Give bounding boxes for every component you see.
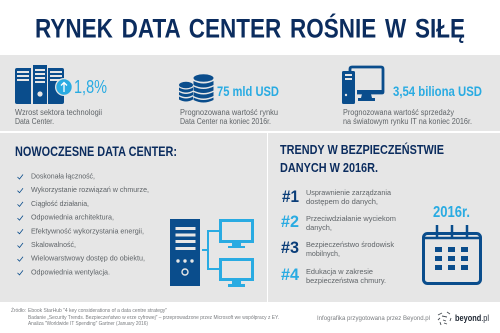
checklist: Wykorzystanie rozwiązań w chmurze, [31,185,149,194]
trend 2: #2 [281,212,299,231]
icon: server towers [15,65,73,104]
heading: TRENDY W BEZPIECZEŃSTWIE [280,142,444,157]
panel: security trends [268,133,500,302]
text: data center market forecast [180,108,278,126]
icon: server connected to monitors [170,219,252,287]
heading: DANYCH W 2016R. [280,161,378,175]
footer sources: Ebook StarHub "4 key considerations of a data centre strategy" [28,308,167,314]
trend 4: #4 [281,265,300,284]
footer sources: Badanie „Security Trends. Bezpieczeństwo w erze cyfrowej” – przeprowadzone przez Microsoft we współpracy z EY. [28,315,279,321]
panel: top statistics [0,55,500,131]
stat: 75 mld USD: 75 mld USD [217,84,279,99]
icon: calendar [423,225,481,284]
checklist: Ciągłość działania, [31,199,89,208]
checklist: Wielowarstwowy dostęp do obiektu, [31,254,145,263]
trend 1: dostępem do danych, [306,197,378,206]
trend 3: #3 [281,238,299,257]
checklist [18,172,149,276]
heading [280,142,444,175]
year label: 2016r. [433,204,470,221]
trend 4: bezpieczeństwa chmury. [306,276,386,285]
checklist: Doskonała łączność, [31,172,95,180]
trend 2: danych, [306,223,332,232]
icon: desktop computer [342,67,383,104]
checklist: Odpowiednia wentylacja. [31,267,110,276]
stat: 1,8%: 1,8% [74,77,107,97]
footer credit: Infografika przygotowana przez Beyond.pl [317,315,431,322]
text: global IT market forecast: Prognozowana wartość sprzedaży [343,108,454,117]
footer sources: Analiza "Worldwide IT Spending" Gartner (January 2016) [28,321,148,327]
trend 3: Bezpieczeństwo środowisk [306,240,394,249]
text: data center market forecast: Prognozowana wartość rynku [180,108,278,117]
trend 2: Przeciwdziałanie wyciekom [306,214,396,223]
text: technology growth: Data Center. [15,117,54,126]
checklist: Efektywność wykorzystania energii, [31,226,144,235]
text: technology growth [15,108,102,126]
logo: beyond.pl [438,312,489,325]
trend 1 [282,187,392,206]
text: global IT market forecast: na światowym rynku IT na koniec 2016r. [343,117,472,126]
trend 4: Edukacja w zakresie [306,267,373,276]
text: technology growth: Wzrost sektora technologii [15,108,102,117]
panel: modern data center [0,133,267,302]
text: data center market forecast: Data Center na koniec 2016r. [180,117,271,126]
trend 2 [281,212,396,232]
logo: beyond.pl: beyond.pl [455,313,489,323]
checklist: Odpowiednia architektura, [31,213,114,222]
trend 1: Usprawnienie zarządzania [306,188,392,197]
checklist: Skalowalność, [31,240,76,249]
text: global IT market forecast [343,108,472,126]
heading: NOWOCZESNE DATA CENTER: [15,143,177,159]
stat: 3,54 biliona USD: 3,54 biliona USD [393,84,482,99]
trend 3: mobilnych, [306,249,340,258]
trend 1: #1 [282,187,299,206]
trend 4 [281,265,386,285]
trend 3 [281,238,394,258]
icon: database coins [179,74,214,102]
footer sources: Źródło: [11,307,26,314]
footer sources [11,307,279,327]
